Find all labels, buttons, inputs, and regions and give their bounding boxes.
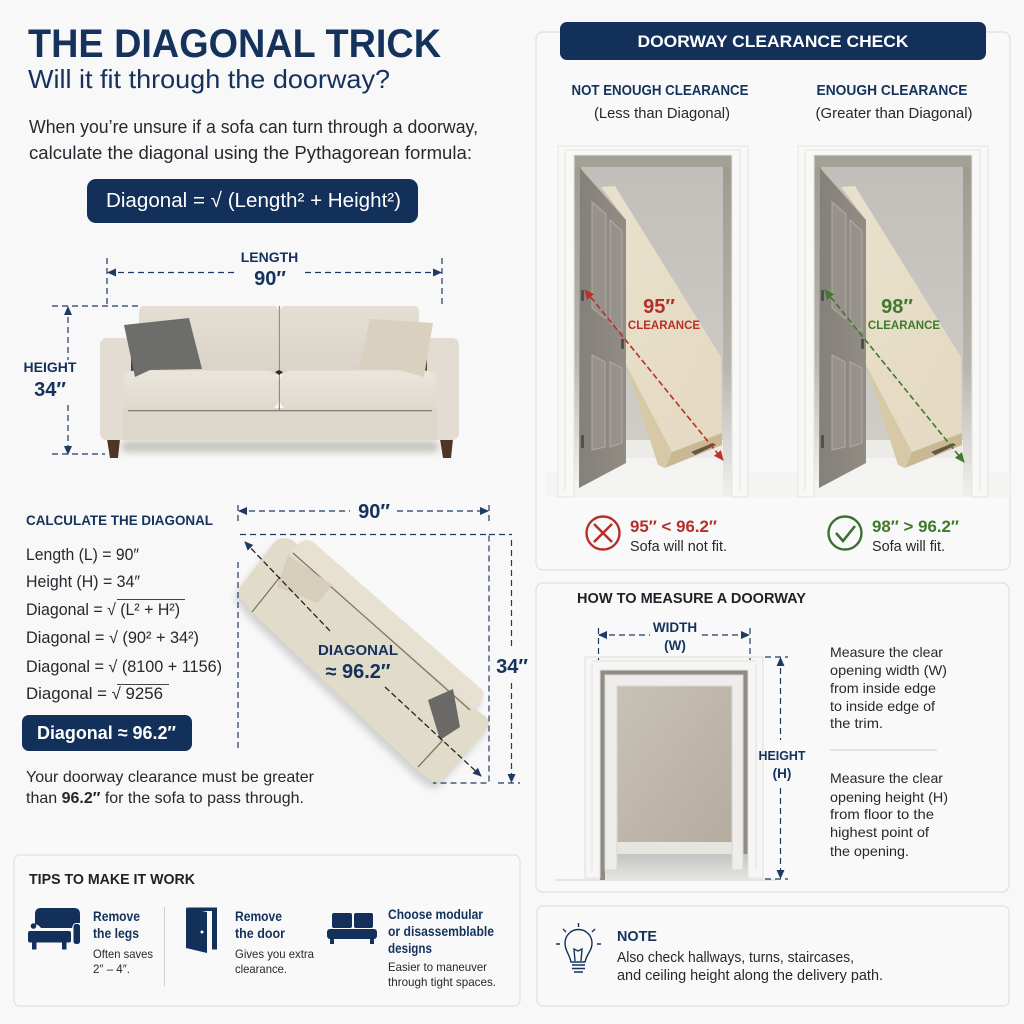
panel: tips bbox=[14, 855, 520, 1006]
result: will fit: Sofa will fit. bbox=[872, 539, 945, 555]
gray pillow bbox=[124, 318, 202, 377]
clearance arrow bbox=[585, 290, 723, 460]
measuring instructions: highest point of bbox=[830, 824, 929, 840]
calculation block: Length (L) = 90″ bbox=[26, 546, 139, 564]
measuring instructions: from inside edge bbox=[830, 680, 936, 696]
calculation block: CALCULATE THE DIAGONAL bbox=[26, 512, 213, 528]
height dimension: HEIGHT bbox=[24, 359, 77, 375]
tip: remove the legs: 2″ – 4″. bbox=[93, 962, 130, 976]
rotated sofa diagram bbox=[236, 501, 528, 788]
tip: modular designs: Choose modular bbox=[388, 907, 484, 922]
formula pill bbox=[87, 179, 418, 223]
title: THE DIAGONAL TRICK bbox=[28, 22, 441, 66]
tip: remove the door: Remove bbox=[235, 909, 282, 924]
tip: remove the door: the door bbox=[235, 926, 286, 941]
intro text: When you’re unsure if a sofa can turn through a doorway, bbox=[29, 117, 478, 137]
result pill bbox=[22, 715, 192, 751]
icon: door bbox=[186, 908, 217, 953]
open doorway illustration bbox=[555, 657, 775, 881]
note text: and ceiling height along the delivery path. bbox=[617, 968, 883, 984]
tip: remove the legs bbox=[93, 909, 153, 976]
height dimension bbox=[758, 657, 806, 879]
heading: enough clearance: ENOUGH CLEARANCE bbox=[816, 82, 968, 99]
note text bbox=[617, 950, 883, 984]
rotated sofa diagram: 34″ bbox=[496, 656, 528, 678]
tip: remove the legs: Remove bbox=[93, 909, 140, 924]
icon: sofa bbox=[28, 908, 80, 950]
door illustration: enough clearance: CLEARANCE bbox=[868, 320, 940, 332]
gray pillow bbox=[428, 689, 460, 740]
tip: modular designs: designs bbox=[388, 941, 432, 956]
beige pillow bbox=[359, 319, 433, 377]
clearance requirement text: than 96.2″ for the sofa to pass through. bbox=[26, 790, 304, 807]
tips heading: TIPS TO MAKE IT WORK bbox=[29, 871, 195, 888]
measuring instructions: the trim. bbox=[830, 715, 883, 731]
calculation block: Diagonal = √ 9256 bbox=[26, 685, 163, 703]
subtitle: Will it fit through the doorway? bbox=[28, 64, 390, 94]
rotated sofa diagram: 90″ bbox=[358, 501, 390, 523]
note heading: NOTE bbox=[617, 928, 657, 945]
door trim bbox=[798, 146, 988, 497]
heading: enough clearance bbox=[816, 82, 972, 122]
diagonal arrow bbox=[245, 542, 330, 631]
door leaf bbox=[579, 168, 626, 488]
result: will fit: 98″ > 96.2″ bbox=[872, 517, 959, 536]
length dimension: LENGTH bbox=[241, 249, 298, 265]
height dimension: (H) bbox=[773, 766, 791, 781]
frame dashes bbox=[238, 534, 520, 783]
length dimension: 90″ bbox=[254, 268, 286, 290]
width dimension: (W) bbox=[664, 638, 686, 653]
intro text: calculate the diagonal using the Pythagorean formula: bbox=[29, 143, 472, 163]
door illustration: enough clearance bbox=[786, 146, 1010, 497]
calculation block: Height (H) = 34″ bbox=[26, 573, 140, 591]
tip: modular designs: or disassemblable bbox=[388, 924, 494, 939]
sofa front view bbox=[100, 306, 459, 458]
formula pill: Diagonal = √ (Length² + Height²) bbox=[106, 189, 401, 212]
rotated sofa diagram: DIAGONAL bbox=[318, 642, 398, 659]
height dimension: HEIGHT bbox=[758, 748, 806, 763]
measuring instructions: opening width (W) bbox=[830, 662, 947, 678]
tip: remove the door: Gives you extra bbox=[235, 947, 314, 961]
rotated sofa diagram: ≈ 96.2″ bbox=[325, 661, 391, 683]
clearance arrow bbox=[825, 290, 964, 462]
icon: light bulb bbox=[556, 923, 601, 972]
calculation block: Diagonal = √ (90² + 34²) bbox=[26, 629, 199, 647]
measuring instructions: the opening. bbox=[830, 843, 909, 859]
tip: modular designs: Easier to maneuver bbox=[388, 960, 487, 974]
result: will not fit: Sofa will not fit. bbox=[630, 539, 727, 555]
panel: doorway clearance check: DOORWAY CLEARANCE CHECK bbox=[638, 32, 909, 51]
door illustration: not enough clearance: CLEARANCE bbox=[628, 320, 700, 332]
tilted sofa bbox=[601, 186, 722, 452]
panel: doorway clearance check bbox=[536, 22, 1010, 570]
tip: remove the legs: Often saves bbox=[93, 947, 153, 961]
calculation block: Diagonal = √ (8100 + 1156) bbox=[26, 658, 222, 676]
icon: modular sofa bbox=[327, 913, 377, 944]
tip: modular designs bbox=[388, 907, 496, 989]
heading: not enough clearance: NOT ENOUGH CLEARANCE bbox=[572, 82, 748, 99]
clearance requirement text: Your doorway clearance must be greater bbox=[26, 769, 315, 786]
heading: HOW TO MEASURE A DOORWAY bbox=[577, 590, 806, 607]
length dimension bbox=[107, 249, 442, 305]
panel: note bbox=[537, 906, 1009, 1006]
measuring instructions: from floor to the bbox=[830, 806, 934, 822]
measuring instructions: to inside edge of bbox=[830, 698, 935, 714]
tip: remove the door bbox=[235, 909, 314, 976]
door illustration: not enough clearance bbox=[546, 146, 798, 497]
tip: remove the door: clearance. bbox=[235, 962, 287, 976]
clearance requirement text bbox=[26, 769, 315, 807]
tilted sofa bbox=[841, 186, 962, 452]
measuring instructions: opening height (H) bbox=[830, 789, 948, 805]
result: will not fit bbox=[586, 516, 727, 555]
measuring instructions: Measure the clear bbox=[830, 770, 943, 786]
calculation block: Diagonal = √ (L² + H²) bbox=[26, 601, 180, 619]
width arrow bbox=[239, 510, 488, 512]
heading: not enough clearance: (Less than Diagonal) bbox=[594, 105, 730, 122]
heading: not enough clearance bbox=[572, 82, 748, 122]
height dimension bbox=[24, 306, 140, 454]
beige pillow bbox=[277, 555, 332, 603]
result pill: Diagonal ≈ 96.2″ bbox=[37, 722, 176, 743]
door trim bbox=[558, 146, 748, 497]
result: will not fit: 95″ < 96.2″ bbox=[630, 517, 717, 536]
panel: how to measure a doorway bbox=[536, 583, 1009, 892]
door illustration: not enough clearance: 95″ bbox=[643, 296, 675, 318]
calculation block bbox=[26, 512, 222, 703]
door leaf bbox=[819, 168, 866, 488]
measuring instructions: Measure the clear bbox=[830, 644, 943, 660]
door illustration: enough clearance: 98″ bbox=[881, 296, 913, 318]
height dimension: 34″ bbox=[34, 379, 66, 401]
measuring instructions bbox=[830, 644, 948, 859]
heading: enough clearance: (Greater than Diagonal) bbox=[816, 105, 972, 122]
tip: remove the legs: the legs bbox=[93, 926, 139, 941]
note text: Also check hallways, turns, staircases, bbox=[617, 950, 854, 966]
result: will fit bbox=[828, 516, 959, 555]
width dimension bbox=[598, 620, 750, 660]
height arrow bbox=[510, 540, 512, 647]
width dimension: WIDTH bbox=[653, 620, 697, 635]
tip: modular designs: through tight spaces. bbox=[388, 975, 496, 989]
header pill bbox=[560, 22, 986, 60]
intro text bbox=[29, 117, 478, 163]
